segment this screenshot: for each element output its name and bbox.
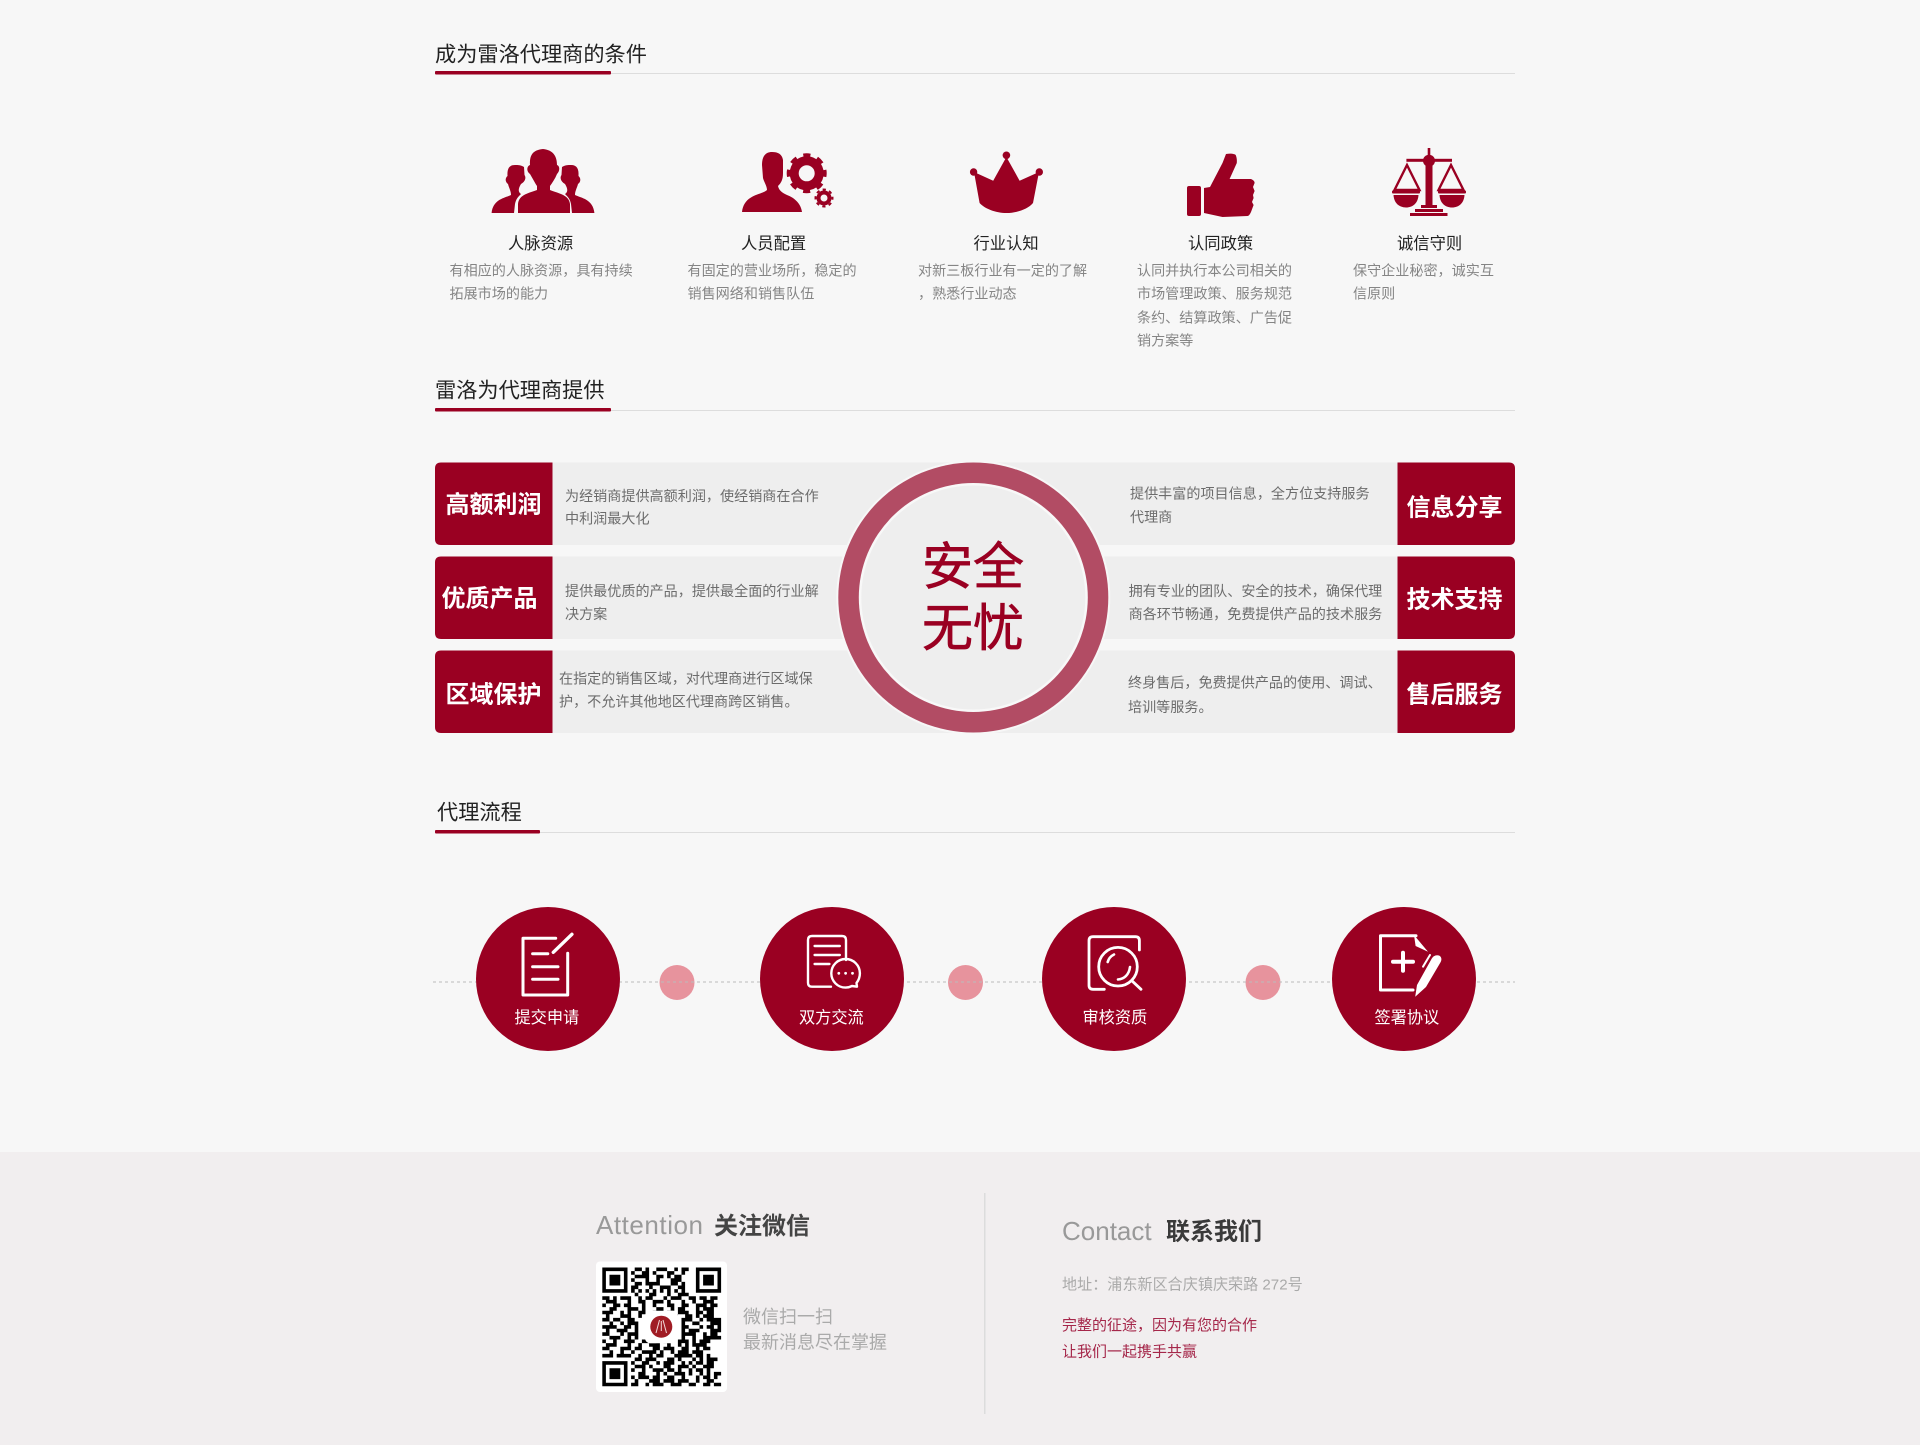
step: submit application xyxy=(476,907,620,1051)
condition: network resources xyxy=(450,149,633,302)
text: slogan xyxy=(1062,1317,1257,1360)
heading: what we provide xyxy=(435,378,1515,412)
connector dots xyxy=(433,965,1515,1000)
text: slogan: 完整的征途，因为有您的合作 xyxy=(1062,1317,1257,1334)
step: two-way communication xyxy=(760,907,904,1051)
benefit: information sharing: 信息分享 xyxy=(1406,495,1502,522)
icon: document with speech bubble xyxy=(808,936,860,988)
text: scan prompt: 微信扫一扫 xyxy=(743,1307,833,1327)
heading: follow WeChat: Attention xyxy=(596,1210,703,1240)
heading: follow WeChat: 关注微信 xyxy=(714,1213,810,1240)
icon: thumbs up xyxy=(1187,154,1255,217)
panel: WeChat xyxy=(596,1210,887,1392)
text: address: 地址：浦东新区合庆镇庆荣路 272号 xyxy=(1062,1275,1303,1293)
step: sign agreement: 签署协议 xyxy=(1374,1009,1439,1027)
benefit: information sharing xyxy=(1130,462,1515,545)
icon: three people xyxy=(492,149,594,213)
condition: staffing: 有固定的营业场所，稳定的 xyxy=(688,262,857,278)
center ring: safe and worry-free xyxy=(836,460,1110,734)
benefit: information sharing: 提供丰富的项目信息，全方位支持服务 xyxy=(1130,485,1370,501)
benefit: high profit: 高额利润 xyxy=(446,492,542,519)
panel: benefits xyxy=(435,460,1515,734)
icon: magnifier on document xyxy=(1089,937,1141,989)
benefit: high profit xyxy=(435,462,819,545)
benefit: quality products xyxy=(435,556,819,639)
condition: industry knowledge: 行业认知 xyxy=(974,235,1039,253)
benefit: technical support xyxy=(1129,556,1515,639)
heading: contact us: 联系我们 xyxy=(1166,1219,1262,1246)
condition: policy: 条约、结算政策、广告促 xyxy=(1137,310,1292,326)
benefit: quality products: 优质产品 xyxy=(442,586,538,613)
benefit: after-sales: 终身售后，免费提供产品的使用、调试、 xyxy=(1128,674,1382,690)
condition: policy xyxy=(1137,154,1292,348)
condition: integrity xyxy=(1353,148,1494,302)
benefit: technical support: 技术支持 xyxy=(1406,587,1502,614)
condition: staffing xyxy=(688,152,857,302)
text: slogan: 让我们一起携手共赢 xyxy=(1062,1343,1197,1360)
benefit: high profit: 中利润最大化 xyxy=(565,510,650,526)
condition: industry knowledge: 对新三板行业有一定的了解 xyxy=(918,262,1087,278)
condition: policy: 认同并执行本公司相关的 xyxy=(1137,262,1292,278)
heading: agent conditions xyxy=(435,42,1515,74)
icon: document with plus and pen xyxy=(1380,935,1441,997)
panel: conditions xyxy=(450,148,1494,348)
condition: staffing: 人员配置 xyxy=(741,235,806,253)
benefit: regional protection: 在指定的销售区域，对代理商进行区域保 xyxy=(559,671,813,687)
benefit: after-sales: 培训等服务。 xyxy=(1128,699,1213,715)
heading: agent conditions: 成为雷洛代理商的条件 xyxy=(435,42,647,66)
step: submit application: 提交申请 xyxy=(514,1009,579,1027)
benefit: technical support: 拥有专业的团队、安全的技术，确保代理 xyxy=(1129,583,1382,599)
heading: what we provide: 雷洛为代理商提供 xyxy=(435,378,605,402)
benefit: quality products: 决方案 xyxy=(565,606,607,622)
heading: contact us: Contact xyxy=(1062,1216,1152,1246)
icon: document with pencil xyxy=(523,934,572,995)
step: qualification review xyxy=(1042,907,1186,1051)
benefit: technical support: 商各环节畅通，免费提供产品的技术服务 xyxy=(1129,606,1382,622)
condition: industry knowledge: ，熟悉行业动态 xyxy=(918,286,1017,302)
condition: network resources: 有相应的人脉资源，具有持续 xyxy=(450,262,633,278)
icon: balance scale xyxy=(1392,148,1466,216)
heading: contact us xyxy=(1062,1216,1262,1246)
benefit: quality products: 提供最优质的产品，提供最全面的行业解 xyxy=(565,583,819,599)
center ring: safe and worry-free: 安全 xyxy=(922,538,1024,596)
heading: follow WeChat xyxy=(596,1210,810,1240)
condition: integrity: 诚信守则 xyxy=(1397,235,1462,253)
QR code xyxy=(596,1262,727,1392)
text: scan prompt: 最新消息尽在掌握 xyxy=(743,1332,887,1352)
process flow xyxy=(433,907,1515,1051)
benefit: regional protection xyxy=(435,650,813,733)
condition: staffing: 销售网络和销售队伍 xyxy=(688,286,814,302)
text: scan prompt xyxy=(743,1307,887,1352)
condition: network resources: 人脉资源 xyxy=(508,235,573,253)
benefit: after-sales xyxy=(1128,650,1515,733)
step: qualification review: 审核资质 xyxy=(1082,1009,1147,1027)
icon: crown xyxy=(970,152,1043,213)
benefit: regional protection: 区域保护 xyxy=(446,682,542,709)
condition: integrity: 信原则 xyxy=(1353,286,1395,302)
condition: integrity: 保守企业秘密，诚实互 xyxy=(1353,262,1494,278)
condition: policy: 认同政策 xyxy=(1188,235,1253,253)
condition: network resources: 拓展市场的能力 xyxy=(450,286,548,302)
footer xyxy=(0,1152,1920,1445)
condition: industry knowledge xyxy=(918,152,1087,302)
step: sign agreement xyxy=(1332,907,1476,1051)
heading: agent process xyxy=(435,800,1515,834)
benefit: high profit: 为经销商提供高额利润，使经销商在合作 xyxy=(565,488,819,504)
center ring: safe and worry-free: 无忧 xyxy=(922,600,1024,657)
icon: person with gears xyxy=(742,152,832,212)
benefit: information sharing: 代理商 xyxy=(1130,509,1172,525)
condition: policy: 市场管理政策、服务规范 xyxy=(1137,286,1292,302)
step: two-way communication: 双方交流 xyxy=(799,1009,864,1027)
benefit: regional protection: 护，不允许其他地区代理商跨区销售。 xyxy=(559,694,799,710)
benefit: after-sales: 售后服务 xyxy=(1406,682,1502,709)
condition: policy: 销方案等 xyxy=(1137,332,1193,348)
heading: agent process: 代理流程 xyxy=(437,800,522,824)
panel: contact xyxy=(1062,1216,1303,1360)
